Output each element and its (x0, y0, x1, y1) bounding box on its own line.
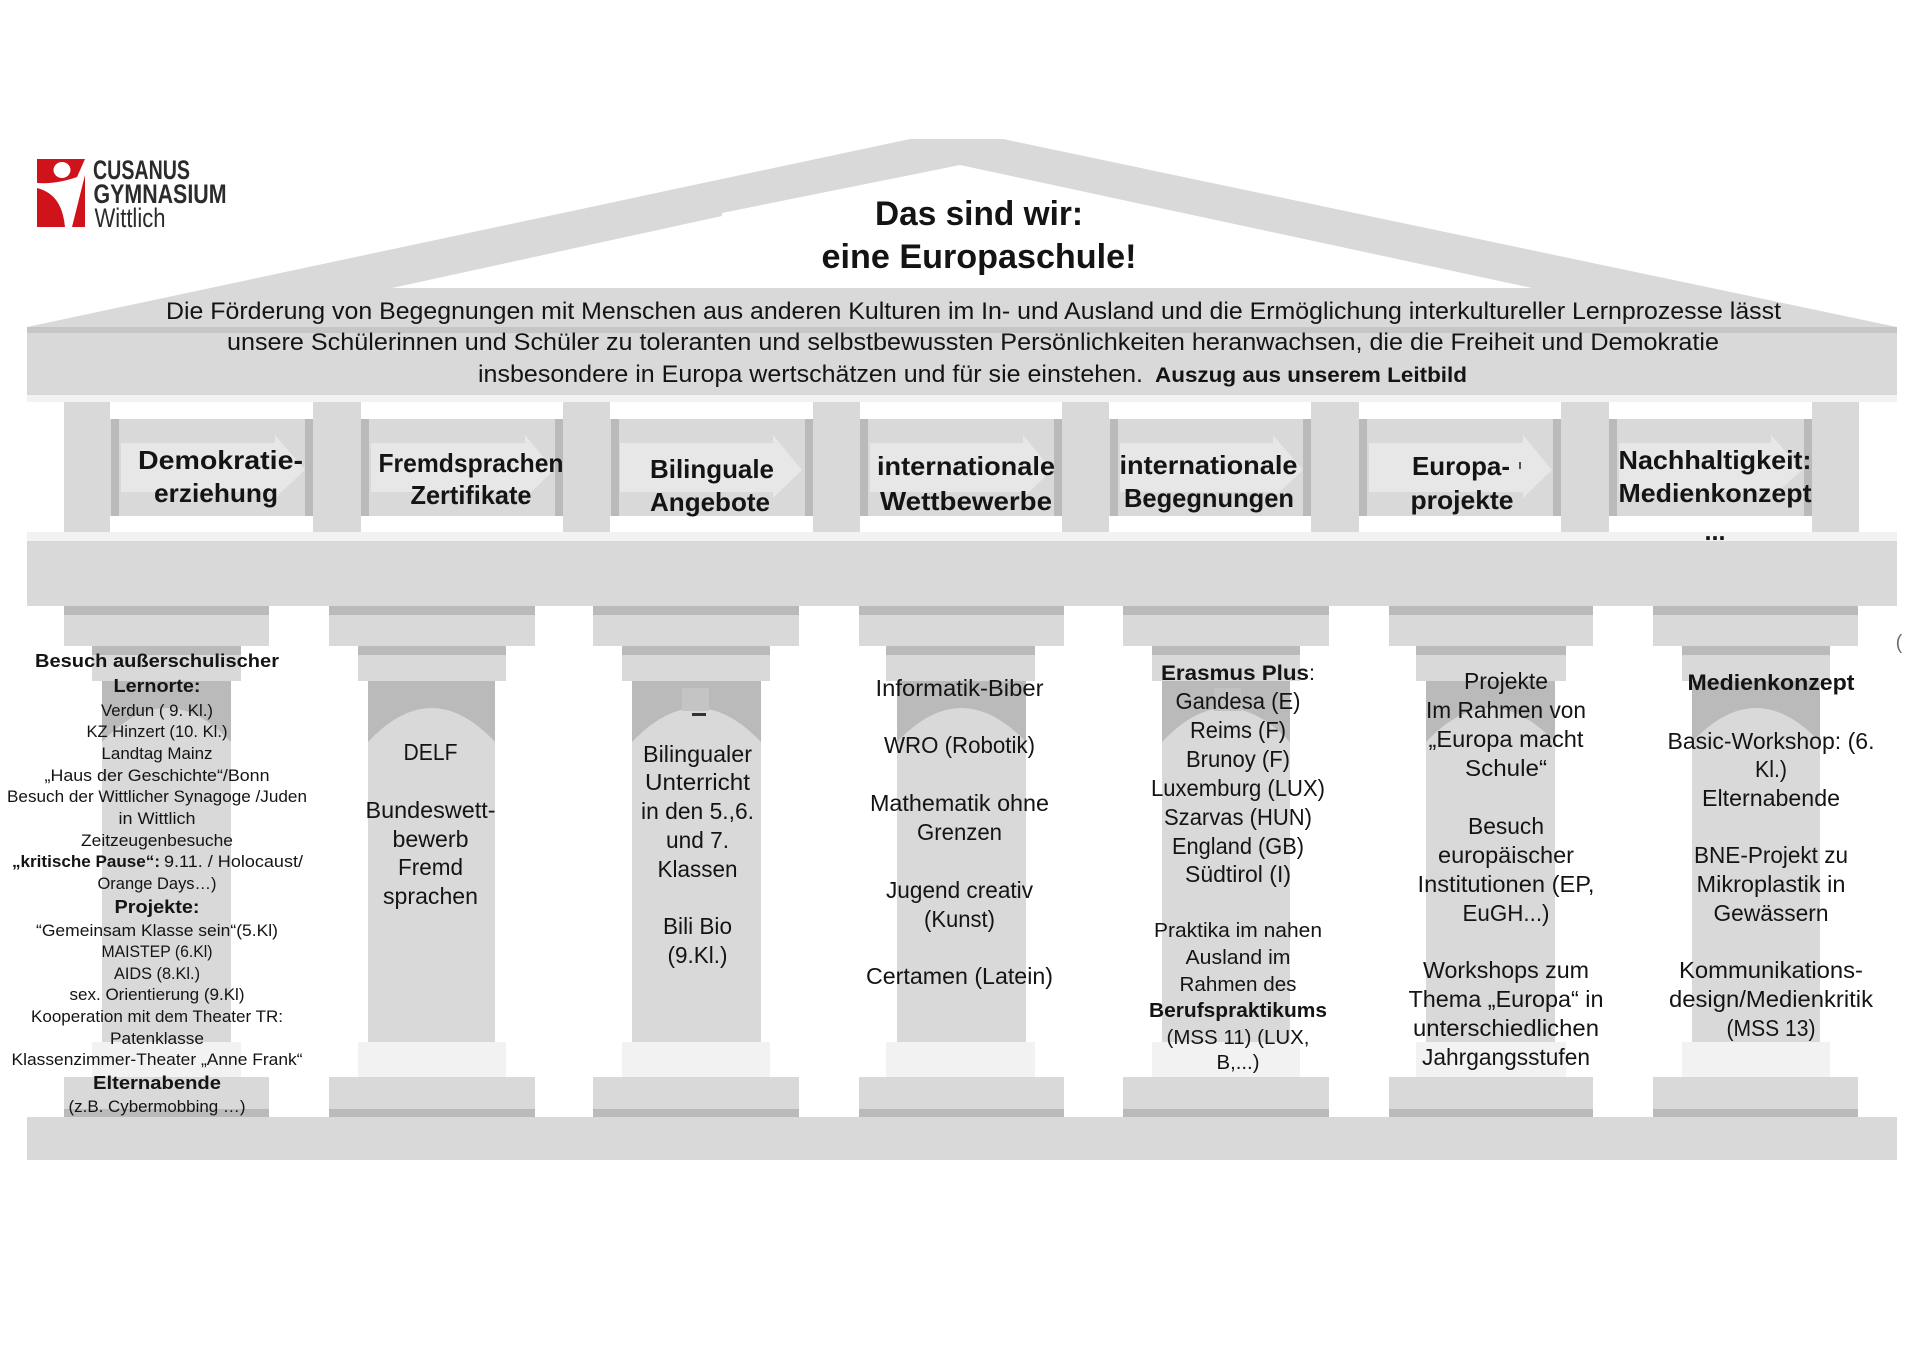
text: column 1 Demokratieerziehung: Besuch außerschulischer (35, 650, 279, 671)
text: column 7 Medienkonzept: design/Medienkritik (1669, 986, 1874, 1012)
text: column 3 Bilingual: und 7. (666, 827, 729, 853)
text: column 7 Medienkonzept: Basic-Workshop: (6. (1668, 728, 1874, 754)
text: column 7 Medienkonzept: Kl.) (1755, 756, 1787, 782)
text: column 1 Demokratieerziehung: Elternabende (93, 1072, 221, 1093)
panel: internationale Wettbewerbe: Wettbewerbe (880, 486, 1052, 516)
text: column 6 Europaprojekte: „Europa macht (1428, 726, 1584, 752)
text: column 1 Demokratieerziehung: (z.B. Cybermobbing …) (68, 1098, 246, 1116)
text: column 7 Medienkonzept: Medienkonzept (1688, 670, 1855, 695)
column 6 shape (1389, 606, 1593, 1117)
title: Das sind wir: (875, 195, 1083, 233)
panel: Nachhaltigkeit Medienkonzept: Medienkonzept (1618, 478, 1812, 508)
text: column 5 Begegnungen: Luxemburg (LUX) (1151, 775, 1325, 801)
mission statement paragraph: insbesondere in Europa wertschätzen und für sie einstehen. (478, 361, 1143, 388)
text: column 1 Demokratieerziehung: MAISTEP (6.Kl) (102, 943, 212, 961)
text: column 3 Bilingual (641, 741, 754, 968)
text: column 4 Wettbewerbe (866, 675, 1053, 989)
text: column 7 Medienkonzept: Elternabende (1702, 785, 1840, 811)
text: column 6 Europaprojekte (1408, 668, 1604, 1070)
text: column 3 Bilingual: (9.Kl.) (668, 942, 728, 968)
panel: Europaprojekte (1359, 419, 1561, 516)
text: column 6 Europaprojekte: Institutionen (EP, (1418, 871, 1594, 897)
panel: Bilinguale Angebote: Bilinguale (650, 454, 774, 484)
text: column 1 Demokratieerziehung: sex. Orientierung (9.Kl) (70, 986, 244, 1004)
panel: internationale Wettbewerbe: internationale (877, 451, 1055, 481)
panel: Europaprojekte: projekte (1410, 485, 1514, 515)
text: column 6 Europaprojekte: Im Rahmen von (1426, 697, 1586, 723)
temple floor (27, 1117, 1897, 1160)
text: column 4 Wettbewerbe: Certamen (Latein) (866, 963, 1053, 989)
text: column 6 Europaprojekte: unterschiedlichen (1413, 1015, 1599, 1041)
mission statement paragraph: unsere Schülerinnen und Schüler zu toleranten und selbstbewussten Persönlichkeiten heranwachsen, die die Freiheit und Demokratie (227, 329, 1719, 356)
text: column 5 Begegnungen: Praktika im nahen (1154, 919, 1322, 942)
text: column 4 Wettbewerbe: Informatik-Biber (876, 675, 1044, 701)
text: column 6 Europaprojekte: Jahrgangsstufen (1422, 1044, 1590, 1070)
text: column 2 Fremdsprachen: Fremd (398, 854, 463, 880)
frieze band (27, 516, 1897, 606)
panel: internationale Begegnungen: internationale (1120, 450, 1298, 480)
text: column 1 Demokratieerziehung: 9.11. / Holocaust/ (164, 853, 303, 871)
panel: Fremdsprachen Zertifikate: Fremdsprachen (378, 448, 564, 478)
text: column 5 Begegnungen: Reims (F) (1190, 717, 1286, 743)
upper row of small pillars (64, 402, 1859, 532)
text: column 3 Bilingual: Bili Bio (663, 913, 732, 939)
text: column 1 Demokratieerziehung: Orange Days…) (98, 875, 216, 893)
text: column 5 Begegnungen: Erasmus Plus (1161, 661, 1309, 685)
text: column 5 Begegnungen: Brunoy (F) (1186, 746, 1290, 772)
text: column 1 Demokratieerziehung: Besuch der Wittlicher Synagoge /Juden (7, 788, 307, 806)
text: column 1 Demokratieerziehung: Klassenzimmer-Theater „Anne Frank“ (12, 1051, 302, 1069)
text: column 1 Demokratieerziehung: Projekte: (114, 896, 200, 917)
text: column 2 Fremdsprachen: bewerb (392, 826, 468, 852)
text: column 4 Wettbewerbe: (Kunst) (924, 906, 995, 932)
text: column 1 Demokratieerziehung: Patenklasse (110, 1030, 204, 1048)
panel: Demokratieerziehung (110, 419, 313, 516)
column 5 shape (1123, 606, 1329, 1117)
text: column 5 Begegnungen: (MSS 11) (LUX, (1166, 1026, 1310, 1049)
panel: Nachhaltigkeit Medienkonzept: Nachhaltigkeit: (1618, 445, 1812, 475)
text: column 6 Europaprojekte: Workshops zum (1423, 957, 1589, 983)
stray mark at right edge: ( (1896, 632, 1903, 654)
school logo: Wittlich (94, 203, 166, 233)
text: column 7 Medienkonzept: Gewässern (1714, 900, 1828, 926)
column 7 shape (1653, 606, 1858, 1117)
panel: Bilinguale Angebote (610, 419, 813, 517)
panel: Bilinguale Angebote: Angebote (650, 487, 770, 517)
panel: internationale Begegnungen: Begegnungen (1124, 483, 1294, 513)
text: column 3 Bilingual: Klassen (658, 856, 738, 882)
panel: internationale Wettbewerbe (860, 419, 1062, 516)
panel: Demokratieerziehung: erziehung (154, 478, 278, 508)
text: column 6 Europaprojekte: Besuch (1468, 813, 1544, 839)
text: column 2 Fremdsprachen (366, 739, 496, 909)
panel: Demokratieerziehung: Demokratie- (138, 445, 303, 475)
text: column 5 Begegnungen (1149, 661, 1327, 1074)
text: column 5 Begegnungen: Rahmen des (1180, 973, 1296, 996)
text: column 5 Begegnungen: Szarvas (HUN) (1164, 804, 1312, 830)
text: column 1 Demokratieerziehung: „Haus der Geschichte“/Bonn (44, 767, 270, 785)
text: column 5 Begegnungen: Berufspraktikums (1149, 999, 1327, 1022)
temple roof and entablature (27, 139, 1897, 402)
column 4 shape (859, 606, 1064, 1117)
text: column 5 Begegnungen: Gandesa (E) (1176, 688, 1300, 714)
text: column 5 Begegnungen: England (GB) (1172, 833, 1304, 859)
text: column 6 Europaprojekte: Thema „Europa“ in (1408, 986, 1604, 1012)
text: column 2 Fremdsprachen: Bundeswett- (366, 797, 496, 823)
text: column 7 Medienkonzept: BNE-Projekt zu (1694, 842, 1848, 868)
text: column 4 Wettbewerbe: Grenzen (917, 819, 1002, 845)
text: column 4 Wettbewerbe: WRO (Robotik) (884, 732, 1035, 758)
mission statement paragraph (166, 298, 1781, 388)
text: column 1 Demokratieerziehung: Lernorte: (114, 675, 200, 696)
text: column 6 Europaprojekte: Projekte (1464, 668, 1548, 694)
text: column 1 Demokratieerziehung: AIDS (8.Kl.) (114, 965, 200, 983)
frieze band: ... (1704, 516, 1726, 546)
title: eine Europaschule! (822, 238, 1136, 276)
text: column 1 Demokratieerziehung: Kooperation mit dem Theater TR: (31, 1008, 283, 1026)
text: column 1 Demokratieerziehung: Zeitzeugenbesuche (81, 832, 233, 850)
panel: Europaprojekte: Europa- (1412, 451, 1510, 481)
text: column 7 Medienkonzept: (MSS 13) (1726, 1015, 1816, 1041)
text: column 5 Begegnungen: B,...) (1216, 1051, 1260, 1074)
text: column 4 Wettbewerbe: Jugend creativ (886, 877, 1033, 903)
school logo (37, 155, 226, 233)
text: column 4 Wettbewerbe: Mathematik ohne (870, 790, 1049, 816)
panel: Nachhaltigkeit Medienkonzept (1609, 419, 1812, 516)
text: column 7 Medienkonzept: Kommunikations- (1679, 957, 1863, 983)
text: column 3 Bilingual: Unterricht (645, 769, 751, 795)
text: column 1 Demokratieerziehung (7, 650, 307, 1116)
text: column 3 Bilingual: Bilingualer (643, 741, 752, 767)
text: column 5 Begegnungen: : (1309, 661, 1315, 685)
title (822, 195, 1136, 276)
mission statement paragraph: Die Förderung von Begegnungen mit Menschen aus anderen Kulturen im In- und Ausland und die Ermöglichung interkultureller Lernprozesse lässt (166, 298, 1781, 325)
text: column 6 Europaprojekte: EuGH...) (1462, 900, 1550, 926)
panel: internationale Begegnungen (1109, 419, 1311, 516)
text: column 1 Demokratieerziehung: “Gemeinsam Klasse sein“(5.Kl) (36, 922, 278, 940)
text: column 1 Demokratieerziehung: „kritische Pause“: (12, 853, 160, 871)
text: column 3 Bilingual: in den 5.,6. (641, 798, 754, 824)
text: column 6 Europaprojekte: Schule“ (1465, 755, 1547, 781)
text: column 7 Medienkonzept: Mikroplastik in (1696, 871, 1846, 897)
text: column 5 Begegnungen: Südtirol (I) (1185, 861, 1291, 887)
school logo: GYMNASIUM (94, 179, 226, 209)
school logo: CUSANUS (93, 155, 190, 185)
text: column 1 Demokratieerziehung: in Wittlich (118, 810, 196, 828)
text: column 5 Begegnungen: Ausland im (1186, 946, 1290, 969)
column 1 shape (64, 606, 269, 1117)
text: column 1 Demokratieerziehung: Landtag Mainz (102, 745, 212, 763)
column 2 shape (329, 606, 535, 1117)
text: column 2 Fremdsprachen: DELF (404, 739, 458, 765)
text: column 1 Demokratieerziehung: KZ Hinzert (10. Kl.) (86, 723, 228, 741)
panel: Fremdsprachen Zertifikate (361, 419, 564, 516)
text: column 1 Demokratieerziehung: Verdun ( 9. Kl.) (101, 702, 213, 720)
text: column 6 Europaprojekte: europäischer (1438, 842, 1574, 868)
column 3 shape (593, 606, 799, 1117)
panel: Fremdsprachen Zertifikate: Zertifikate (410, 480, 532, 510)
mission statement paragraph: Auszug aus unserem Leitbild (1155, 364, 1467, 387)
text: column 7 Medienkonzept (1668, 670, 1874, 1041)
text: column 2 Fremdsprachen: sprachen (383, 883, 478, 909)
